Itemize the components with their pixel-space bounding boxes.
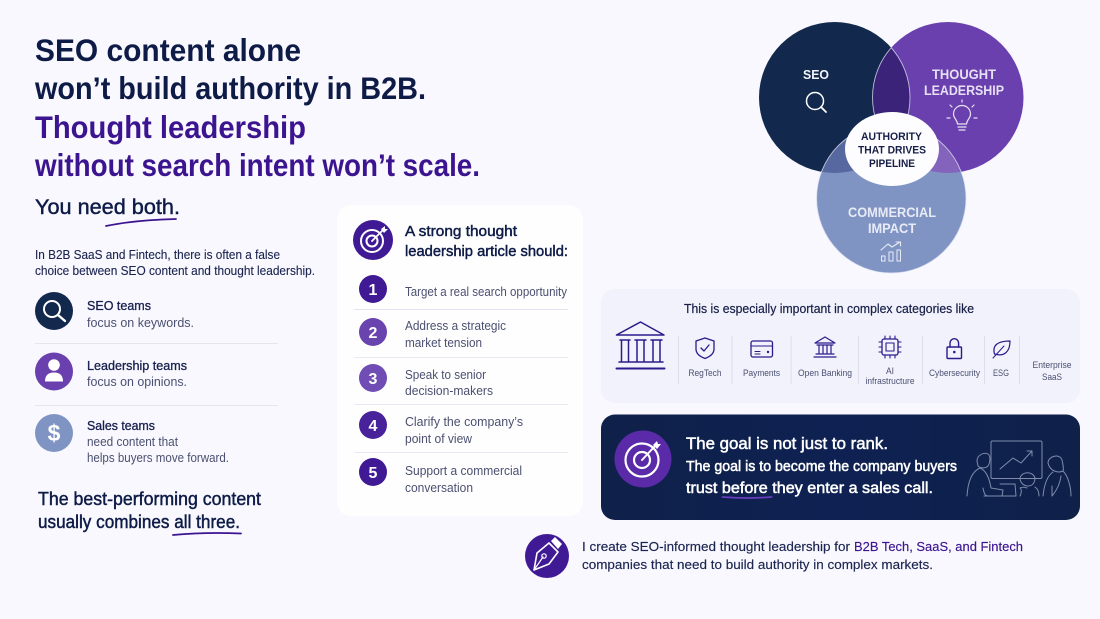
category: AI infrastructure: AI (886, 366, 894, 376)
category: AI infrastructure: infrastructure (866, 376, 914, 386)
text: sales teams: helps buyers move forward. (87, 450, 229, 465)
team list (35, 292, 278, 465)
category: Payments (743, 341, 780, 378)
headline: without search intent won’t scale. (34, 147, 480, 183)
venn label: commercial impact: IMPACT (868, 221, 917, 236)
text: sales teams: need content that (87, 434, 178, 449)
category: Cybersecurity: Cybersecurity (929, 368, 980, 378)
intro paragraph (35, 248, 315, 278)
icon: sales teams dollar (35, 414, 73, 452)
subheading: you need both: You need both. (35, 195, 180, 219)
category: AI infrastructure (866, 336, 914, 386)
card heading (405, 224, 568, 260)
venn centre: authority that drives pipeline: THAT DRIVES (858, 144, 926, 156)
goal statement (686, 434, 957, 497)
category: Enterprise SaaS: SaaS (1042, 372, 1062, 382)
panel: the goal (601, 414, 1080, 520)
item 3: Speak to senior (405, 368, 486, 382)
item 2: 2 (369, 325, 378, 342)
categories heading: This is especially important in complex categories like (684, 302, 974, 316)
venn label: SEO: SEO (803, 68, 829, 82)
item 5: Support a commercial (405, 464, 522, 478)
item 4: Clarify the company’s (405, 415, 523, 429)
category: Open Banking (798, 337, 852, 378)
venn label: thought leadership: THOUGHT (932, 67, 997, 82)
intro paragraph: In B2B SaaS and Fintech, there is often a false (35, 248, 280, 262)
category: Open Banking: Open Banking (798, 368, 852, 378)
item 3 (359, 364, 493, 398)
item 3: 3 (369, 371, 378, 388)
icon: target (353, 220, 393, 260)
callout: best-performing content (38, 489, 261, 535)
goal statement: The goal is not just to rank. (686, 434, 888, 453)
category: Payments: Payments (743, 368, 780, 378)
item 4 (359, 411, 523, 446)
category: Enterprise SaaS (1032, 360, 1072, 382)
text: SEO teams: SEO teams (87, 298, 151, 313)
venn label: SEO (803, 68, 829, 112)
icon: fountain pen (525, 534, 569, 578)
text: leadership teams: focus on opinions. (87, 374, 187, 389)
category: Cybersecurity (929, 339, 980, 378)
text: sales teams: Sales teams (87, 418, 155, 433)
venn label: thought leadership (924, 67, 1004, 130)
positioning statement: companies that need to build authority in complex markets. (582, 557, 933, 572)
category: ESG: ESG (993, 368, 1009, 378)
panel: complex categories (601, 289, 1080, 403)
venn label: thought leadership: LEADERSHIP (924, 83, 1004, 98)
item 2: Address a strategic (405, 319, 506, 333)
category: ESG (993, 341, 1010, 378)
item 1 (359, 275, 568, 303)
category: Enterprise SaaS: Enterprise (1032, 360, 1072, 370)
text: sales teams (87, 418, 229, 465)
item 1: Target a real search opportunity (405, 285, 568, 299)
icon: sales teams dollar: $ (48, 420, 61, 446)
headline: SEO content alone (35, 32, 301, 68)
positioning statement (582, 539, 1023, 572)
panel: thought leadership article checklist (337, 205, 583, 516)
item 3: decision-makers (405, 384, 493, 398)
icon: goal target (614, 430, 672, 488)
icon: leadership teams person (35, 352, 73, 390)
venn centre: authority that drives pipeline (845, 112, 939, 186)
venn label: commercial impact: COMMERCIAL (848, 205, 936, 220)
positioning statement: I create SEO-informed thought leadership for (582, 539, 851, 554)
item 4: point of view (405, 432, 473, 446)
item 5: conversation (405, 481, 473, 495)
category: RegTech: RegTech (688, 368, 722, 378)
text: SEO teams: focus on keywords. (87, 315, 194, 330)
item 5 (359, 458, 522, 495)
item 4: 4 (369, 418, 378, 435)
goal statement: The goal is to become the company buyers (686, 459, 957, 475)
icon: SEO teams magnifier (35, 292, 73, 330)
item 2: market tension (405, 336, 482, 350)
positioning statement: B2B Tech, SaaS, and Fintech (854, 539, 1023, 554)
card heading: leadership article should: (405, 244, 568, 260)
icon: large bank (616, 322, 664, 368)
item 2 (359, 318, 506, 350)
item 5: 5 (369, 465, 378, 482)
venn diagram (759, 22, 1024, 273)
callout: best-performing content: The best-performing content (38, 489, 261, 509)
category: RegTech (688, 338, 722, 378)
illustration: team at chart (967, 441, 1071, 496)
venn centre: authority that drives pipeline: AUTHORITY (861, 131, 923, 143)
item 1: 1 (369, 282, 378, 299)
headline (34, 32, 480, 183)
goal statement: trust before they enter a sales call. (686, 480, 933, 497)
intro paragraph: choice between SEO content and thought leadership. (35, 264, 315, 278)
venn label: commercial impact (848, 205, 936, 261)
callout: best-performing content: usually combines all three. (38, 512, 240, 532)
text: SEO teams (87, 298, 194, 330)
headline: won’t build authority in B2B. (34, 70, 426, 106)
headline: Thought leadership (35, 109, 306, 145)
venn centre: authority that drives pipeline: PIPELINE (869, 158, 915, 170)
text: leadership teams (87, 358, 187, 389)
card heading: A strong thought (405, 224, 517, 240)
text: leadership teams: Leadership teams (87, 358, 187, 373)
